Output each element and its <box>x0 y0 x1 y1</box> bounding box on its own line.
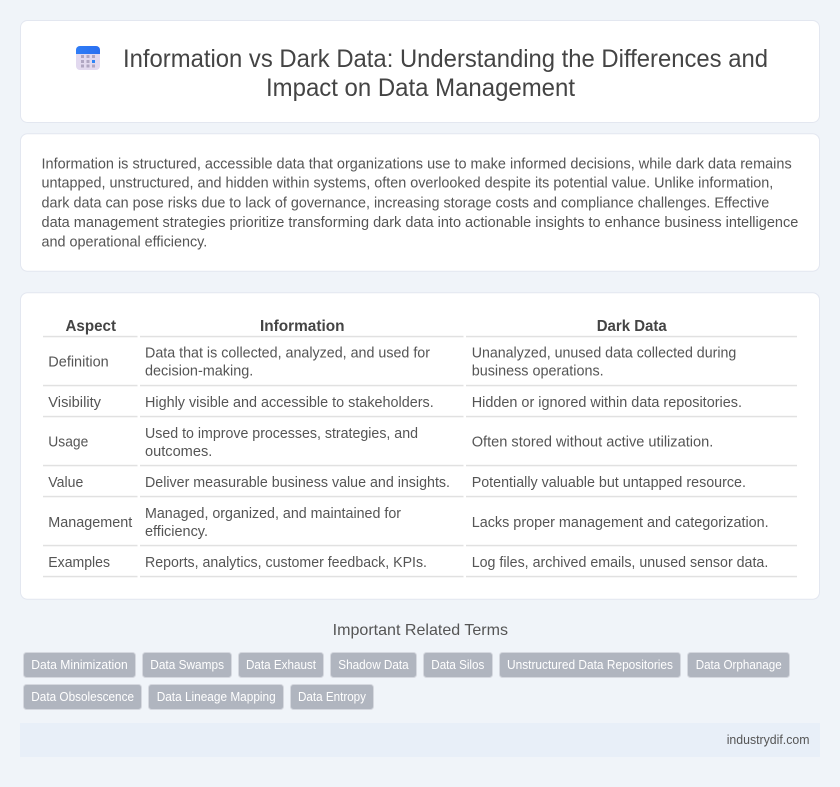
table row: management: Managed, organized, and maintained for <box>145 506 401 522</box>
heading: important related terms: Important Related Terms <box>333 622 508 639</box>
text block: summary: data management strategies prioritize transforming dark data into actionable insights to enhance business intelligence <box>42 215 798 231</box>
table row: visibility <box>43 395 797 417</box>
text block: summary: dark data can pose risks due to lack of governance, increasing storage costs and compliance challenges. Effective <box>42 195 769 211</box>
panel: summary paragraph <box>20 134 820 271</box>
related term tags: Data Obsolescence <box>31 690 134 704</box>
table header row: Aspect <box>66 318 117 335</box>
table header row: Dark Data <box>597 318 667 335</box>
table row: definition: decision-making. <box>145 364 253 380</box>
related term tags: Data Minimization <box>31 658 128 672</box>
title: Information vs Dark Data: Understanding the Differences and <box>123 45 768 73</box>
text block: summary: and operational efficiency. <box>42 234 207 250</box>
table row: management: efficiency. <box>145 524 208 540</box>
table row: definition: business operations. <box>472 364 604 380</box>
text block: summary: untapped, unstructured, and hidden within systems, often overlooked despite its potential value. Unlike information, <box>42 176 773 192</box>
table row: value: Deliver measurable business value and insights. <box>145 475 450 491</box>
table header row <box>43 318 797 337</box>
text block: summary <box>42 156 798 250</box>
table row: usage: Usage <box>48 435 88 451</box>
table header row: Information <box>260 318 344 335</box>
related term tags: Data Orphanage <box>696 658 782 672</box>
table row: examples <box>43 555 797 577</box>
table row: usage: Often stored without active utilization. <box>472 435 713 451</box>
table row: definition <box>43 346 797 386</box>
table row: visibility: Highly visible and accessible to stakeholders. <box>145 395 434 411</box>
related term tags: Shadow Data <box>338 658 409 672</box>
text block: summary: Information is structured, accessible data that organizations use to make informed decisions, while dark data remains <box>42 156 792 172</box>
table row: usage: Used to improve processes, strategies, and <box>145 426 418 442</box>
footer bar: industrydif.com <box>727 733 810 747</box>
table row: examples: Reports, analytics, customer feedback, KPIs. <box>145 555 427 571</box>
table row: value: Potentially valuable but untapped resource. <box>472 475 746 491</box>
table row: examples: Log files, archived emails, unused sensor data. <box>472 555 768 571</box>
table row: visibility: Visibility <box>48 395 102 411</box>
table row: usage <box>43 426 797 466</box>
title <box>123 45 768 102</box>
table row: management <box>43 506 797 546</box>
related term tags: Data Entropy <box>298 690 367 704</box>
table row: management: Lacks proper management and categorization. <box>472 515 769 531</box>
related term tags: Data Swamps <box>150 658 224 672</box>
table row: definition: Unanalyzed, unused data collected during <box>472 346 736 362</box>
title: Impact on Data Management <box>266 74 575 102</box>
panel: comparison table <box>20 293 820 599</box>
table row: visibility: Hidden or ignored within data repositories. <box>472 395 742 411</box>
table row: value <box>43 475 797 497</box>
footer bar <box>20 723 820 757</box>
table row: usage: outcomes. <box>145 444 212 460</box>
icon: calendar <box>76 46 100 70</box>
table row: definition: Data that is collected, analyzed, and used for <box>145 346 430 362</box>
table row: management: Management <box>48 515 132 531</box>
related term tags <box>24 652 790 710</box>
panel: header <box>20 20 820 122</box>
table row: examples: Examples <box>48 555 110 571</box>
related term tags: Data Lineage Mapping <box>157 690 276 704</box>
table row: definition: Definition <box>48 355 109 371</box>
table row: value: Value <box>48 475 83 491</box>
related term tags: Data Silos <box>431 658 484 672</box>
related term tags: Unstructured Data Repositories <box>507 658 673 672</box>
related term tags: Data Exhaust <box>246 658 316 672</box>
